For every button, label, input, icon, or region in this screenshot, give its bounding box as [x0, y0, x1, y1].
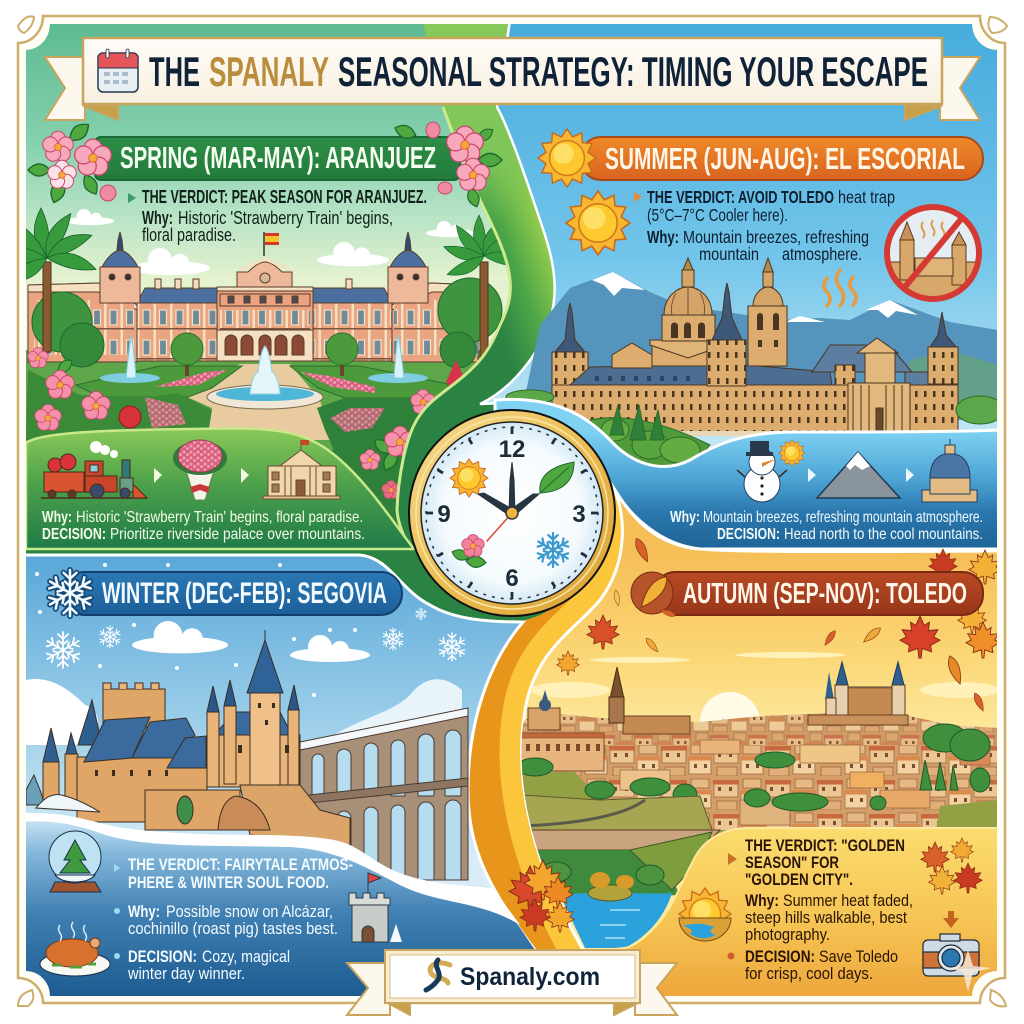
autumn sky wisps: [530, 652, 1000, 698]
icon: blossoms right: [393, 122, 502, 209]
text: winter verdict: winter day winner.: [127, 964, 245, 983]
panel: spring lower: [26, 428, 414, 549]
text: winter verdict: Possible snow on Alcázar,: [166, 902, 333, 921]
illustration: aqueduct: [300, 708, 468, 880]
green swoosh band: [478, 151, 554, 368]
spring edge highlight: [397, 107, 510, 550]
illustration: Alcazar of Segovia: [26, 630, 350, 845]
fallen leaves on gold band: [509, 860, 574, 932]
river, bridge and hills: [522, 795, 720, 948]
corner leaf top-right: [988, 17, 1007, 33]
garden flowers right: [360, 360, 466, 499]
text: summer verdict: [634, 187, 895, 264]
icon: winter castle: [349, 873, 402, 942]
fountains: [100, 335, 428, 409]
winter clouds: [26, 621, 462, 745]
autumn scattered leaves: [557, 536, 1001, 712]
clock hour ticks: [426, 427, 598, 599]
logo ribbon left: [347, 963, 410, 1015]
Spanish flag: [264, 232, 279, 256]
text: autumn verdict: "GOLDEN CITY".: [745, 870, 853, 889]
palace gardens and plaza: [26, 332, 448, 525]
clock numerals: 9: [437, 501, 451, 528]
lower winter panel: [20, 813, 540, 1000]
icon: calendar: [98, 49, 138, 92]
text: summer verdict: mountain: [699, 244, 759, 264]
icon: snowman with sun: [737, 440, 805, 502]
green swoosh top highlight: [423, 24, 528, 214]
text: summer why and decision: Head north to the cool mountains.: [784, 526, 983, 543]
pill: winter header: [47, 570, 402, 616]
text: winter verdict: Why:: [128, 902, 160, 921]
clock numerals: [437, 436, 586, 592]
illustration: Toledo city: [515, 662, 1005, 860]
logo ribbon right: [614, 963, 677, 1015]
panel: autumn: [515, 487, 1005, 1000]
text: spring verdict: THE VERDICT: PEAK SEASON FOR ARANJUEZ.: [142, 187, 427, 207]
illustration: Aranjuez palace: [26, 232, 516, 450]
text: winter verdict: cochinillo (roast pig) tastes best.: [128, 919, 338, 938]
icon: dome building: [922, 439, 977, 502]
text: spring why and decision: Why:: [42, 509, 72, 526]
clock numerals: 6: [505, 565, 519, 592]
gold swoosh band: [468, 480, 624, 952]
snow dots: [35, 563, 357, 697]
text: spring verdict: Historic 'Strawberry Train' begins,: [178, 208, 393, 228]
clock season icons: [450, 459, 574, 568]
autumn lower panel: [582, 828, 1000, 1000]
corner leaf bottom-right: [990, 990, 1006, 1006]
text: spring why and decision: Historic 'Strawberry Train' begins, floral paradise.: [76, 509, 363, 526]
text: spring why and decision: DECISION:: [42, 526, 106, 543]
setting sun: [700, 692, 760, 722]
title text: THE: [149, 48, 200, 95]
text: autumn verdict: Save Toledo: [819, 947, 898, 966]
arrow: [808, 468, 816, 482]
icon: palace: [263, 440, 340, 499]
icon: mountain: [817, 452, 900, 498]
arrow: [154, 468, 162, 483]
summer lower panel: [495, 399, 1000, 549]
text: summer why and decision: DECISION:: [717, 526, 780, 543]
corner leaf bottom-left: [18, 990, 33, 1006]
text: summer verdict: atmosphere.: [782, 244, 862, 264]
heading: spring: SPRING (MAR-MAY): ARANJUEZ: [120, 141, 436, 175]
icon: flower bouquet: [173, 440, 227, 500]
title text: [149, 48, 928, 95]
text: autumn verdict: steep hills walkable, best: [745, 908, 907, 927]
clock hands: [478, 462, 539, 541]
text: autumn verdict: SEASON" FOR: [745, 853, 839, 872]
clock numerals: 3: [572, 501, 586, 528]
text: autumn verdict: Summer heat faded,: [783, 891, 913, 910]
text: summer why and decision: Why:: [670, 509, 700, 526]
icon: winter snowflake: [47, 570, 93, 616]
text: winter verdict: DECISION:: [128, 947, 197, 966]
arrow down: [943, 911, 959, 928]
text: winter verdict: THE VERDICT: FAIRYTALE ATMOS-: [128, 855, 353, 874]
logo banner: [347, 950, 677, 1015]
summer foreground trees: [506, 390, 1004, 466]
arrow: [241, 468, 249, 483]
text: summer verdict: heat trap: [838, 187, 895, 207]
text: summer why and decision: [670, 509, 983, 543]
text: autumn verdict: THE VERDICT: "GOLDEN: [745, 836, 905, 855]
text: spring verdict: floral paradise.: [142, 225, 236, 245]
icon: large sun: [566, 191, 630, 255]
corner leaf top-left: [18, 16, 34, 33]
text: autumn verdict: for crisp, cool days.: [745, 964, 873, 983]
icon: autumn leaf badge: [631, 572, 676, 618]
clock numerals: 12: [499, 436, 525, 463]
text: summer verdict: THE VERDICT: AVOID TOLEDO: [647, 187, 834, 207]
text: winter verdict: [114, 855, 353, 983]
panel: spring: [26, 24, 509, 525]
icon: camera: [923, 934, 979, 976]
text: summer verdict: Why:: [647, 227, 679, 247]
arrow: [906, 468, 914, 482]
seasonal clock: [409, 410, 615, 616]
text: winter verdict: PHERE & WINTER SOUL FOOD.: [128, 873, 329, 892]
snowflakes: [45, 608, 466, 668]
text: autumn verdict: Why:: [745, 891, 779, 910]
sparkle watermark: [948, 950, 992, 992]
title banner: [45, 38, 980, 120]
text: winter verdict: Cozy, magical: [202, 947, 290, 966]
icon: sunset over river: [679, 888, 731, 941]
icon: snow globe: [49, 831, 101, 892]
text: summer verdict: (5°C–7°C Cooler here).: [647, 205, 788, 225]
spring sky clouds: [66, 209, 474, 275]
pill: spring header: [95, 137, 460, 180]
illustration: El Escorial monastery: [552, 258, 958, 433]
icon: heat waves: [824, 270, 856, 306]
icon: blossoms left: [28, 120, 116, 205]
pill: autumn header: [631, 572, 983, 618]
palm trees and bushes: [26, 207, 506, 368]
icon: roast dish: [40, 922, 110, 976]
garden flowers left: [28, 348, 186, 430]
text: autumn verdict: photography.: [745, 925, 830, 944]
icon: Spanaly logo: [426, 960, 450, 990]
panel: summer: [480, 20, 1004, 549]
text: autumn verdict: [728, 836, 913, 983]
text: spring verdict: [128, 187, 427, 245]
logo text: Spanaly.com: [460, 963, 600, 991]
banner ribbon right: [905, 57, 980, 120]
panel: winter: [20, 555, 540, 1000]
pill: summer header: [538, 129, 983, 187]
city trees: [517, 724, 990, 811]
text: spring why and decision: Prioritize riverside palace over mountains.: [110, 526, 365, 543]
title text: SPANALY: [209, 48, 329, 95]
summer mountains: [520, 272, 998, 420]
icon: summer sun header: [538, 129, 596, 187]
text: autumn verdict: DECISION:: [745, 947, 815, 966]
snow band: [20, 813, 520, 925]
text: spring verdict: Why:: [142, 208, 173, 228]
text: spring why and decision: [42, 509, 365, 543]
icon: no Toledo heat: [885, 207, 985, 312]
text: summer verdict: Mountain breezes, refreshing: [683, 227, 869, 247]
banner ribbon left: [45, 57, 118, 120]
icon: strawberry train: [41, 441, 147, 498]
heading: winter: WINTER (DEC-FEB): SEGOVIA: [102, 577, 387, 610]
icon: autumn leaves: [921, 838, 982, 894]
